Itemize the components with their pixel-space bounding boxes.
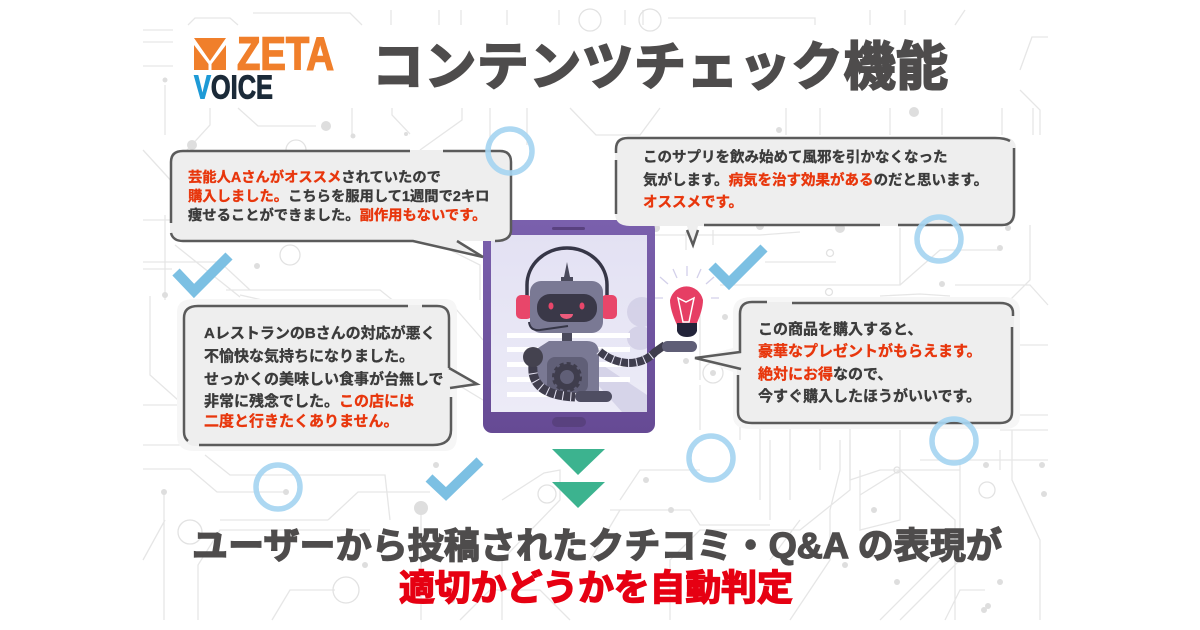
speech bubble 4: 不愉快な気持ちになりました。 <box>204 347 414 365</box>
tablet body <box>483 220 655 433</box>
speech bubble 1: 痩せることができました。副作用もないです。 <box>188 206 486 224</box>
speech bubble 1: 購入しました。こちらを服用して1週間で2キロ <box>188 187 489 205</box>
blue ring decorations <box>256 129 976 509</box>
bubble 2 text: このサプリを飲み始めて風邪を引かなくなった <box>643 148 948 166</box>
arrow: green down triangles <box>552 449 605 508</box>
bubble 1 text: 芸能人Aさんがオススメされていたので <box>188 168 441 186</box>
footer heading <box>192 525 1002 608</box>
speech bubble 4 <box>177 299 477 451</box>
bubble 4 text: AレストランのBさんの対応が悪く <box>204 324 436 342</box>
robot <box>516 248 697 402</box>
speech bubble 4: 二度と行きたくありません。 <box>204 412 399 430</box>
title: コンテンツチェック機能 <box>372 39 948 97</box>
blue check marks <box>176 248 764 494</box>
speech bubble 1 <box>170 150 512 257</box>
speech bubble 2 <box>615 137 1016 245</box>
speech bubble 3: 絶対にお得なので、 <box>758 365 892 383</box>
speech bubble 3: 今すぐ購入したほうがいいです。 <box>758 387 981 405</box>
speech bubble 3 <box>695 297 1020 429</box>
icon: gear <box>554 364 580 390</box>
icon: light bulb <box>655 266 719 337</box>
speech bubble 3: 豪華なプレゼントがもらえます。 <box>758 342 982 360</box>
speech bubble 2: 気がします。病気を治す効果があるのだと思います。 <box>643 171 988 189</box>
tablet screen <box>491 235 647 412</box>
bubble 3 text: この商品を購入すると、 <box>758 320 922 338</box>
icon: logo mark <box>194 38 226 70</box>
tablet with robot <box>483 220 697 433</box>
footer heading: ユーザーから投稿されたクチコミ・Q&A の表現が <box>192 525 1002 566</box>
logo: ZETA VOICE <box>194 28 334 106</box>
speech bubble 4: 非常に残念でした。この店には <box>204 392 414 410</box>
logo: ZETA VOICE: ZETA <box>237 28 334 80</box>
footer highlight: 適切かどうかを自動判定 <box>399 567 793 608</box>
logo: ZETA VOICE: VOICE <box>194 68 273 106</box>
speech bubble 2: オススメです。 <box>643 194 743 211</box>
speech bubble 4: せっかくの美味しい食事が台無しで <box>204 370 444 388</box>
